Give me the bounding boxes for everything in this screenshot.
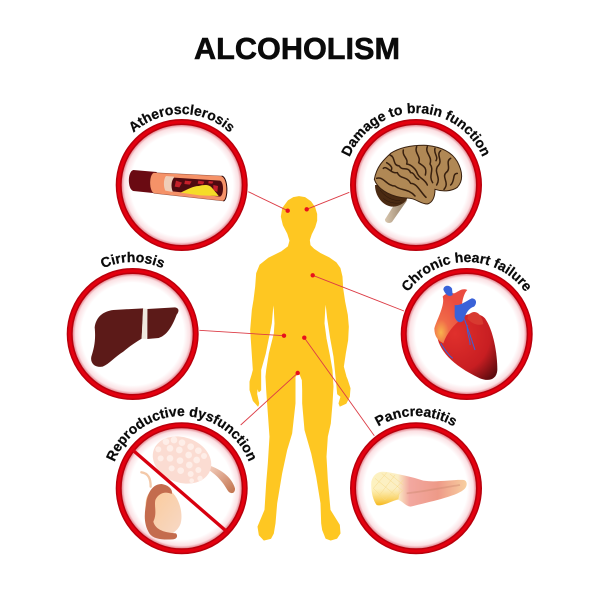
- leader line: heart: [310, 273, 404, 311]
- leader line: liver: [199, 330, 286, 338]
- leader line: brain: [304, 192, 349, 212]
- leader line: pancreas: [302, 336, 374, 436]
- ring: [70, 271, 196, 397]
- icon: reproductive organs: [133, 428, 235, 540]
- leader line: atherosclerosis: [248, 192, 290, 213]
- ring: [119, 122, 245, 248]
- icon: pancreas: [371, 472, 467, 507]
- label: Pancreatitis: [374, 408, 456, 426]
- panel: pancreas: [350, 408, 482, 554]
- label: Reproductive dysfunction: [106, 407, 255, 462]
- ring: [119, 425, 245, 551]
- panel: liver: [66, 252, 199, 400]
- panel: reproductive dysfunction: [106, 407, 255, 554]
- panel: heart: [400, 252, 533, 400]
- icon: cirrhotic liver: [91, 307, 178, 367]
- human body silhouette: [250, 197, 350, 540]
- icon: heart: [434, 286, 497, 380]
- label: Chronic heart failure: [402, 252, 530, 291]
- ring: [353, 425, 479, 551]
- leader line: reproductive: [241, 371, 300, 425]
- ring: [353, 122, 479, 248]
- label: Damage to brain function: [341, 102, 488, 157]
- panel: atherosclerosis: [116, 104, 248, 251]
- title: ALCOHOLISM: [194, 31, 400, 66]
- icon: artery with plaque: [129, 170, 227, 201]
- panel: brain: [341, 102, 488, 251]
- label: Atherosclerosis: [130, 104, 234, 133]
- ring: [404, 271, 530, 397]
- icon: brain: [374, 145, 462, 223]
- label: Cirrhosis: [101, 252, 164, 268]
